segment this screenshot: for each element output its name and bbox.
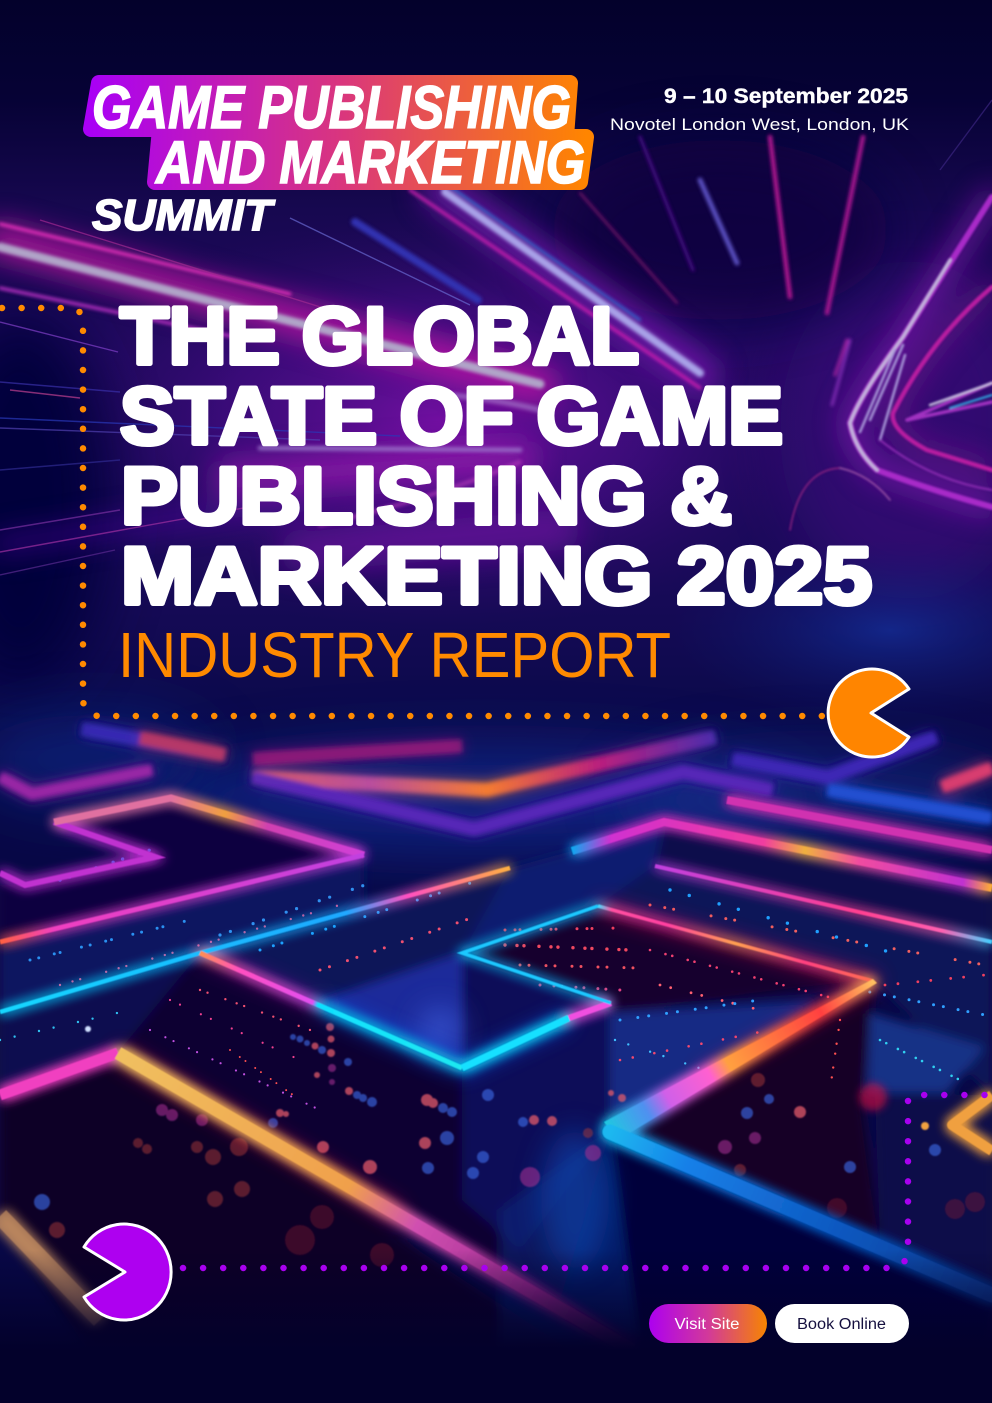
icon: purple pac-man [84,1224,171,1320]
neon outlines [118,906,873,1215]
main title [120,292,872,622]
purple dotted frame [183,1095,992,1268]
logo gradient badge [91,83,586,182]
event date and venue [610,85,910,134]
light rays upper section [0,100,992,575]
event venue: Novotel London West, London, UK [610,115,910,134]
maze scene [0,715,992,1403]
button: visit site [649,1304,767,1343]
logo: game publishing and marketing summit [91,74,586,240]
icon: orange pac-man [828,669,909,757]
main title: MARKETING 2025 [121,532,872,622]
logo text line 1: GAME PUBLISHING [92,74,571,141]
bokeh dots [34,1023,985,1267]
main title: THE GLOBAL [120,292,639,382]
main title: PUBLISHING & [121,452,732,542]
button: visit site: Visit Site [674,1316,740,1333]
sparkle dots [0,850,985,1110]
button: book online [775,1304,909,1343]
maze walls [0,798,992,1370]
subtitle: INDUSTRY REPORT [118,619,671,691]
logo text summit: SUMMIT [92,191,275,240]
event date: 9 – 10 September 2025 [664,85,908,108]
orange dotted frame [2,308,822,716]
logo text line 2: AND MARKETING [154,129,585,196]
button: book online: Book Online [797,1316,886,1333]
main title: STATE OF GAME [120,372,783,462]
